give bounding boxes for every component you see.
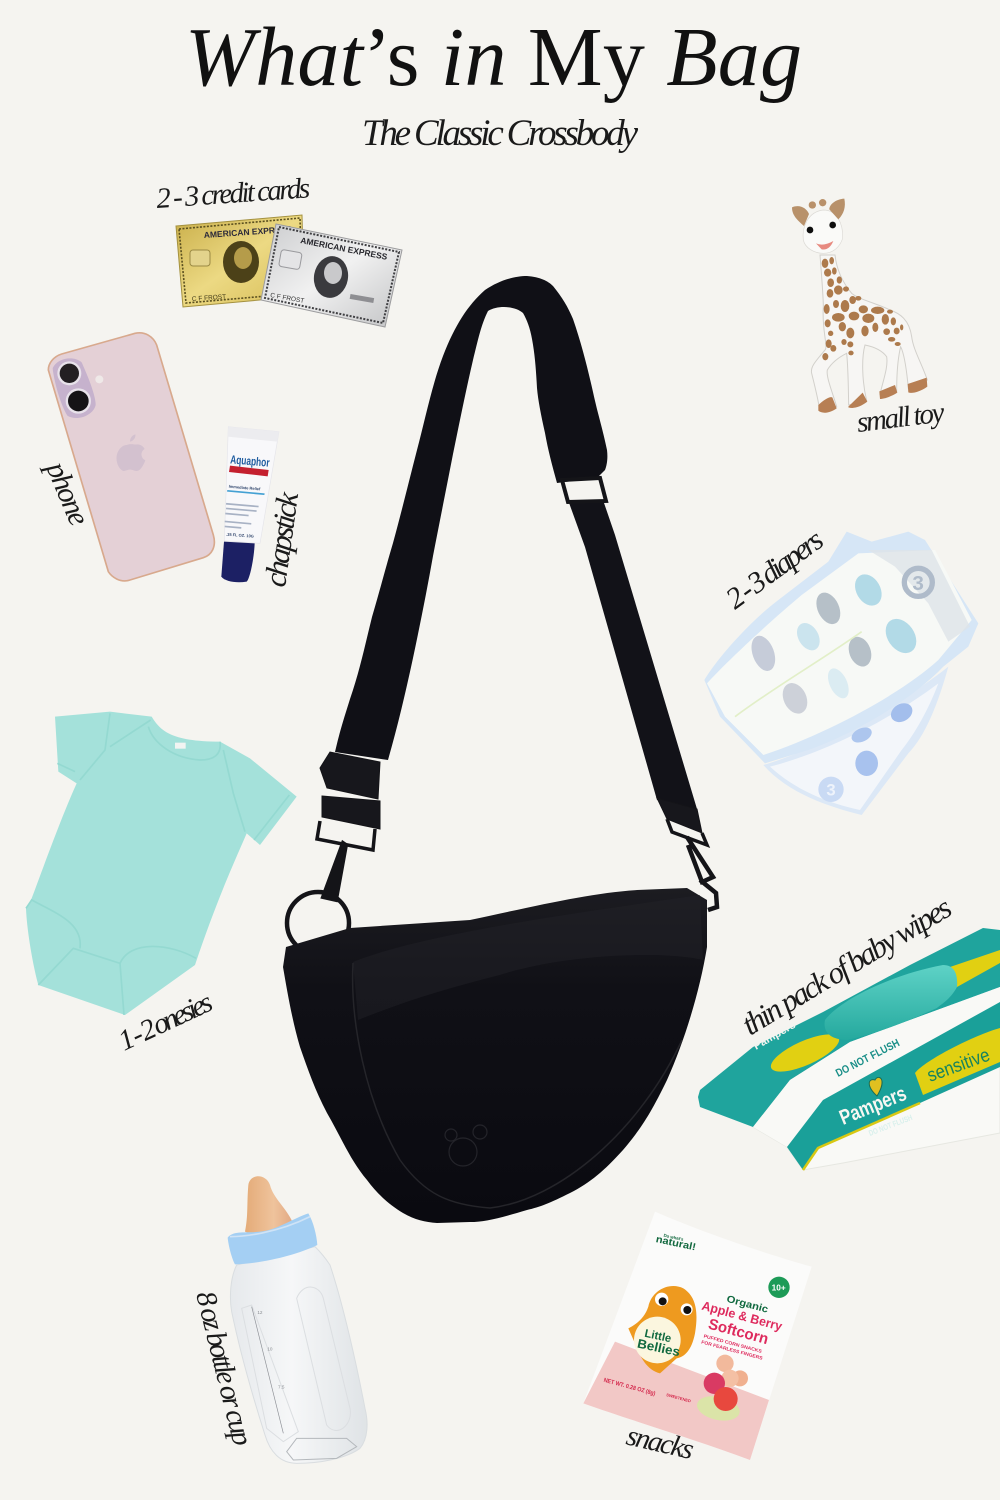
- bag fold: [353, 895, 703, 1020]
- product name: Apple & Berry: [700, 1299, 784, 1334]
- icon: wipes: DO NOT FLUSH: [834, 1037, 902, 1080]
- onesie neck and sleeve seams: [26, 713, 289, 1015]
- icon: chapstick: .35 FL OZ. 10G: [226, 532, 254, 539]
- icon: wipes: sensitive: [925, 1045, 993, 1087]
- wipes upper white band: [753, 987, 1000, 1147]
- icon: snack pouch: NET WT. 0.28 OZ (8g): [603, 1378, 656, 1397]
- title: What’s in My Bag: [185, 11, 802, 104]
- gold card: AMERICAN EXPRESS: [203, 224, 293, 240]
- giraffe head: [803, 210, 843, 253]
- giraffe body: [811, 255, 927, 408]
- product name: Organic: [725, 1294, 770, 1316]
- wipes pack base: [753, 985, 1000, 1170]
- icon: wipes: DO NOT FLUSH: [867, 1113, 914, 1138]
- bag seam: [353, 963, 682, 1208]
- mascot: Bellies: [636, 1337, 681, 1359]
- label: phone: phone: [39, 455, 96, 530]
- wipes top teal: [698, 928, 1000, 1127]
- icon: onesie: [26, 712, 297, 1015]
- brand: Do what's: [663, 1233, 685, 1242]
- bag body: [283, 888, 707, 1223]
- wipes yellow trim: [803, 1103, 920, 1170]
- strap hardware: [287, 478, 717, 954]
- wipes lid: [825, 965, 957, 1040]
- whale prints: [747, 589, 875, 718]
- label: snacks: snacks: [623, 1420, 697, 1466]
- bottle nipple: [245, 1176, 293, 1237]
- icon: chapstick: Immediate Relief: [229, 484, 261, 491]
- icon: baby bottle: [228, 1176, 367, 1463]
- bottle collar: [228, 1213, 317, 1264]
- pouch: [583, 1212, 812, 1460]
- icon: snack pouch: SWEETENED: [666, 1392, 692, 1404]
- icon: diapers: [704, 532, 978, 815]
- subtitle: The Classic Crossbody: [362, 113, 639, 154]
- icon: wipes: [698, 928, 1000, 1170]
- bottle body: [230, 1247, 367, 1463]
- bottle gauge numbers: 12: [257, 1310, 263, 1315]
- silver card: [261, 224, 402, 327]
- mascot: [628, 1286, 696, 1373]
- product name: [700, 1294, 784, 1361]
- icon: credit cards: [176, 215, 402, 327]
- number badge: 3: [912, 572, 924, 595]
- product name: FOR FEARLESS FINGERS: [701, 1339, 763, 1361]
- gold card: C F FROST: [192, 294, 226, 303]
- bottle moulding: [242, 1287, 350, 1442]
- product name: PUFFED CORN SNACKS: [703, 1333, 762, 1354]
- icon: crossbody bag: [283, 276, 717, 1223]
- giraffe hooves: [818, 378, 927, 413]
- icon: chapstick: Aquaphor: [230, 452, 270, 470]
- wipes front teal: [787, 1002, 1000, 1170]
- label: chapstick: chapstick: [257, 489, 305, 589]
- fruit: [695, 1355, 748, 1424]
- label: small toy: small toy: [855, 396, 946, 439]
- label: credit cards: 2 - 3 credit cards: [155, 172, 311, 215]
- icon: phone: [48, 333, 214, 581]
- wipes yellow oval: [915, 1028, 1000, 1095]
- icon: snack pouch: 10+: [772, 1282, 786, 1292]
- bag logo: [445, 1125, 487, 1166]
- upper diaper: [704, 532, 978, 763]
- apple logo: [116, 434, 145, 471]
- lower strap: [568, 500, 697, 809]
- lower diaper: [763, 667, 948, 815]
- product name: Softcorn: [706, 1316, 770, 1348]
- silver card: C F FROST: [270, 292, 305, 305]
- onesie tag: [175, 743, 186, 749]
- strap: [335, 276, 607, 760]
- bottle gauge numbers: [257, 1310, 285, 1389]
- mascot: Little: [643, 1328, 672, 1345]
- bottle gauge numbers: 10: [267, 1347, 273, 1352]
- camera module: [53, 358, 103, 418]
- badge: [768, 1277, 790, 1298]
- wipes yellow small: [766, 1027, 844, 1079]
- label: wipes: thin pack of baby wipes: [736, 889, 958, 1042]
- label: diapers: 2 - 3 diapers: [720, 523, 830, 616]
- icon: snack pouch: [583, 1212, 812, 1460]
- icon: wipes: Pampers: [836, 1082, 910, 1130]
- label: onesies: 1 - 2 onesies: [113, 986, 218, 1057]
- silver card: AMERICAN EXPRESS: [300, 235, 389, 262]
- icon: snack pouch: natural!: [655, 1234, 697, 1253]
- icon: wipes: Pampers: [752, 1019, 798, 1053]
- icon: giraffe toy: [792, 199, 927, 413]
- icon: chapstick: [221, 427, 279, 582]
- label: bottle: 8 oz bottle or cup: [189, 1288, 258, 1449]
- number badge: [904, 568, 932, 596]
- gold card: [176, 215, 304, 307]
- icon: diapers: 3: [826, 780, 836, 799]
- giraffe spots: [822, 257, 903, 360]
- wipes heart: [869, 1077, 882, 1096]
- bottle gauge numbers: 7.5: [278, 1384, 285, 1389]
